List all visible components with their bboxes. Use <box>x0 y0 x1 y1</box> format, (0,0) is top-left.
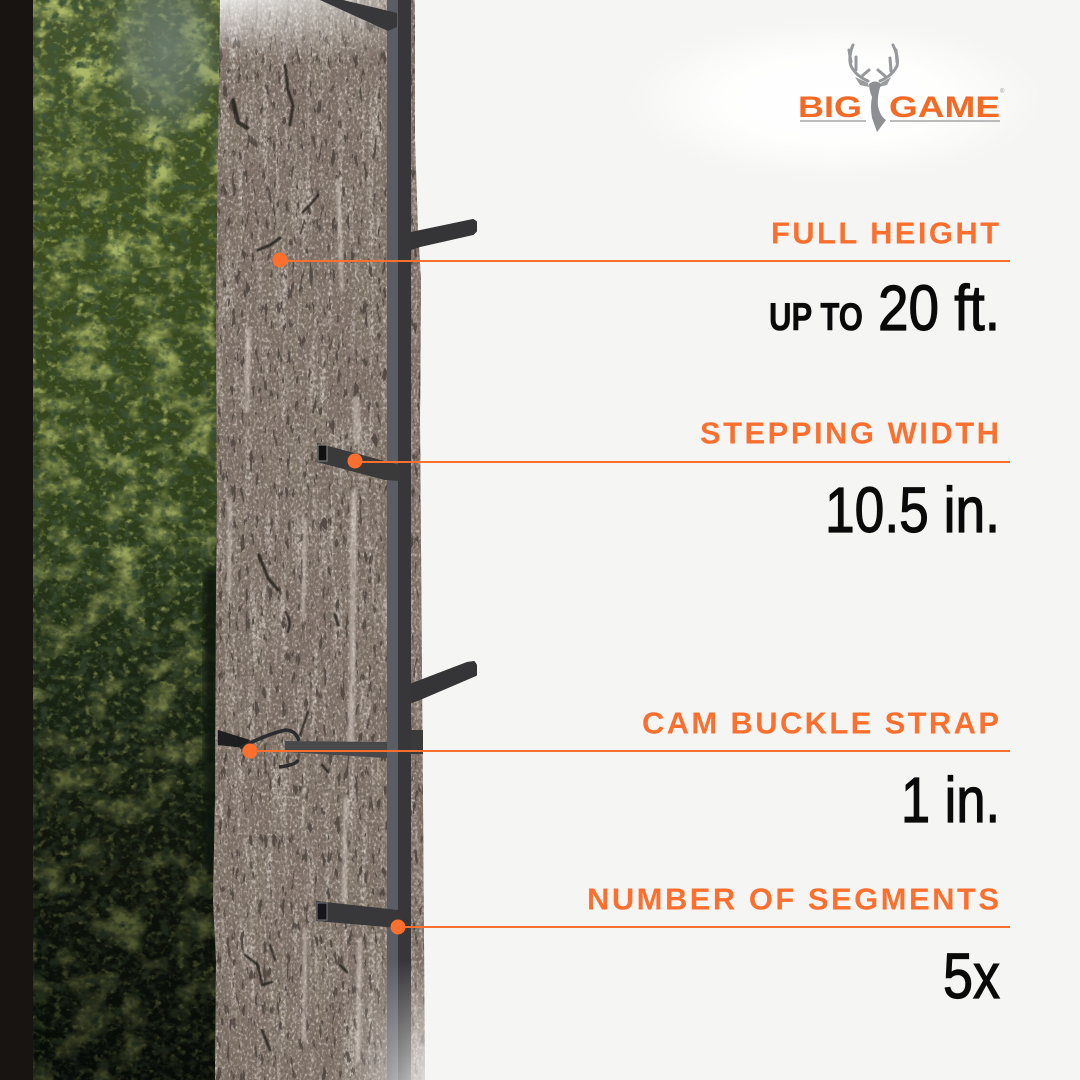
callout: cam buckle strap <box>242 706 1010 836</box>
logo glow <box>625 18 1045 182</box>
icon: deer head <box>849 45 898 132</box>
icon: step stepping width <box>317 443 400 481</box>
panel: forest background <box>0 0 225 1080</box>
panel: tree trunk <box>210 0 430 1080</box>
logo underline <box>800 120 1000 122</box>
callout: stepping width <box>348 416 1010 546</box>
value: 5x: 5x <box>943 940 1000 1012</box>
label: number of segments: NUMBER OF SEGMENTS <box>587 882 999 916</box>
icon: step bottom <box>316 901 398 928</box>
value: up to 20 ft.: UP TO <box>769 296 863 339</box>
icon: cam buckle strap <box>218 730 387 767</box>
leader line: number of segments <box>390 920 1010 934</box>
tree top fade <box>220 0 387 56</box>
value: 1 in.: 1 in. <box>901 764 1000 836</box>
icon: ladder rail <box>387 0 423 1080</box>
label: stepping width: STEPPING WIDTH <box>700 416 999 450</box>
leader line: stepping width <box>348 454 1010 468</box>
value: up to 20 ft. <box>769 272 1000 344</box>
leader line: full height <box>272 252 1010 268</box>
leader line: cam buckle strap <box>242 744 1010 758</box>
icon: step right lower <box>412 662 476 702</box>
icon: top step <box>320 0 397 31</box>
callout: full height <box>272 216 1010 344</box>
logo registered mark: ® <box>1000 88 1005 95</box>
label: cam buckle strap: CAM BUCKLE STRAP <box>642 706 999 740</box>
callout: number of segments <box>390 882 1010 1012</box>
logo wordmark: BIG: BIG <box>798 91 862 124</box>
value: 10.5 in.: 10.5 in. <box>825 474 1000 546</box>
logo wordmark: GAME: GAME <box>889 91 1000 124</box>
icon: step right upper <box>411 220 476 249</box>
label: full height: FULL HEIGHT <box>771 216 999 250</box>
value: up to 20 ft.: 20 ft. <box>878 272 1000 344</box>
logo: Big Game <box>798 45 1005 132</box>
tree bottom fade <box>346 968 425 1080</box>
